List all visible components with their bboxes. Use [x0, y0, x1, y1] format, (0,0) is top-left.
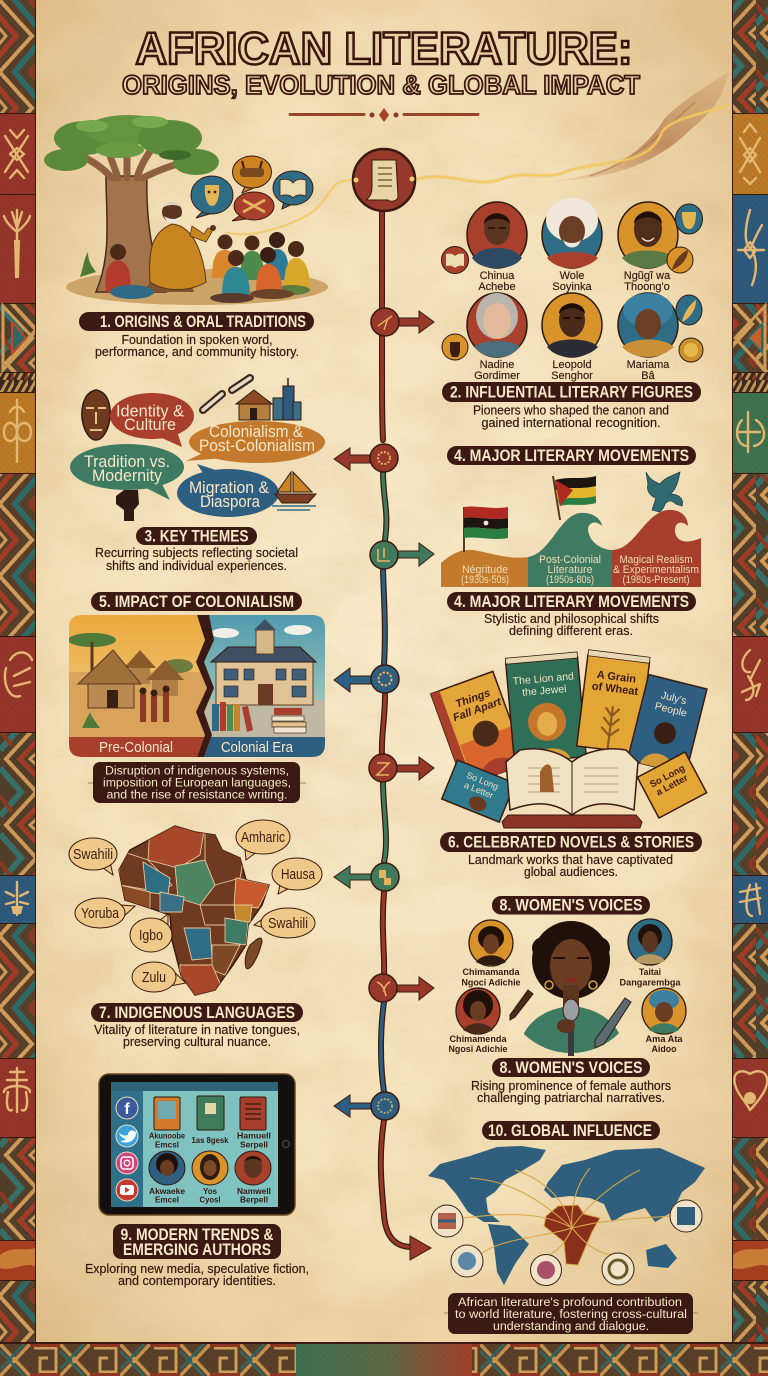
bubble: Yoruba: Yoruba — [81, 906, 120, 922]
section 9: tablet with emerging authors — [99, 1074, 295, 1215]
title divider ornament — [290, 108, 478, 122]
wave: Magical Realism — [612, 510, 701, 587]
icon: medal — [679, 338, 703, 362]
names of women authors: Aidoo — [652, 1044, 677, 1055]
book: Things Fall Apart — [431, 671, 526, 786]
bubble: Igbo — [130, 914, 172, 952]
medal: university seal — [451, 1245, 483, 1277]
wave labels: (1950s-80s) — [546, 574, 594, 586]
tablet screen — [111, 1082, 290, 1207]
book titles: Serpell — [240, 1140, 268, 1150]
text: themes description — [95, 545, 298, 573]
timeline node 4: blue left arrow — [334, 665, 399, 693]
bubble: tradition vs modernity: Tradition vs. — [84, 452, 170, 471]
main portrait with microphone — [524, 921, 619, 1056]
names of women authors: Chimamenda — [450, 1034, 507, 1045]
text: figures description — [473, 402, 669, 430]
portrait: Wole Soyinka — [542, 198, 602, 268]
heading: key themes: 3. KEY THEMES — [144, 528, 248, 546]
section 8: women's voices portraits — [448, 919, 686, 1056]
right patterned border — [732, 0, 768, 1376]
book: So Long a Letter gold: a Letter — [654, 772, 690, 798]
names row 2 — [474, 359, 670, 382]
bubble: drum — [232, 156, 272, 193]
panel: colonial school — [204, 615, 325, 757]
text: women's voices description: Rising prominence of female authors — [471, 1078, 671, 1093]
heading: modern trends: EMERGING AUTHORS — [123, 1241, 271, 1259]
icon: book — [442, 246, 468, 274]
names of women authors: Ngosi Adichie — [448, 1044, 508, 1055]
book: July's People: July's — [660, 689, 688, 707]
icon: dragon — [646, 472, 682, 512]
bubble: mask — [191, 176, 233, 218]
open book — [502, 749, 642, 828]
icon: Facebook: f — [124, 1101, 130, 1118]
names row 2: Nadine — [480, 359, 514, 371]
text: modern trends description: and contemporary identities. — [118, 1273, 276, 1288]
medal: laurel award — [602, 1253, 634, 1285]
bubble: Yoruba — [75, 898, 135, 928]
text: movements description: defining different eras. — [509, 623, 633, 638]
text box: colonialism description: imposition of European languages, — [103, 776, 291, 790]
title: ORIGINS, EVOLUTION & GLOBAL IMPACT — [122, 70, 640, 100]
wave labels — [461, 554, 699, 586]
golden routes — [462, 1168, 670, 1256]
icon: sailboat — [272, 472, 316, 510]
jagged divider — [196, 615, 214, 757]
names row 2: Senghor — [551, 370, 593, 382]
book: A Grain of Wheat — [577, 650, 650, 754]
section 4: movements wave chart — [441, 472, 701, 587]
portrait: Ngugi wa Thiong'o — [618, 202, 678, 268]
bubble: book — [273, 171, 313, 209]
timeline node 2: red left arrow — [334, 444, 398, 472]
wave labels: (1930s-50s) — [461, 574, 509, 586]
portrait: Ama Ata Aidoo — [642, 988, 686, 1034]
mini books — [154, 1096, 266, 1130]
text: movements description: Stylistic and philosophical shifts — [484, 611, 659, 626]
title — [122, 23, 640, 100]
book: The Lion and the Jewel — [505, 652, 586, 763]
book: Things Fall Apart: Things — [454, 687, 492, 711]
icon: Twitter bird — [116, 1125, 138, 1147]
bubble: identity and culture: Identity & — [116, 402, 185, 420]
text: figures description: Pioneers who shaped the canon and — [473, 402, 669, 418]
timeline node 7: red right arrow — [369, 974, 434, 1002]
title: AFRICAN LITERATURE: — [136, 23, 632, 74]
medal: library seal — [670, 1200, 702, 1232]
timeline start: scroll medallion — [353, 149, 415, 211]
bubble: quill — [232, 192, 274, 221]
bubble: Igbo: Igbo — [139, 928, 163, 944]
book: A Grain of Wheat: of Wheat — [591, 680, 639, 698]
elder storyteller — [145, 202, 216, 292]
bubble: identity and culture — [110, 393, 194, 447]
icon: Instagram — [116, 1152, 138, 1174]
author names: Namwell — [237, 1186, 271, 1196]
portrait: Leopold Senghor — [542, 293, 602, 357]
heading: modern trends: 9. MODERN TRENDS & — [120, 1226, 274, 1244]
text: novels description: Landmark works that have captivated — [468, 852, 673, 867]
section 6: stack of celebrated novels — [431, 650, 707, 828]
timeline node 6: green left arrow — [334, 863, 399, 891]
bubble: Hausa — [272, 858, 322, 894]
icon: fountain pen right — [595, 998, 631, 1048]
icon: quill — [667, 247, 693, 273]
names of women authors: Chimamanda — [462, 967, 520, 978]
names row 1: Achebe — [478, 281, 516, 293]
bubble: Swahili left: Swahili — [73, 847, 113, 863]
caption: Colonial Era: Colonial Era — [221, 740, 294, 756]
bubble: Hausa: Hausa — [281, 867, 316, 883]
text: women's voices description — [471, 1078, 671, 1105]
icon: fountain pen left — [510, 990, 533, 1020]
text: languages description — [94, 1022, 300, 1049]
caption: Pre-Colonial: Pre-Colonial — [99, 740, 173, 756]
book titles: Emcsl — [155, 1140, 179, 1150]
Africa highlighted — [544, 1205, 600, 1265]
book titles: Hamuell — [237, 1130, 271, 1140]
text: languages description: preserving cultural nuance. — [123, 1034, 271, 1049]
heading: origins: 1. ORIGINS & ORAL TRADITIONS — [100, 313, 306, 331]
book: July's People: People — [653, 700, 688, 720]
timeline spine with colour segments — [381, 212, 412, 1247]
icon: raised fist — [116, 490, 139, 521]
heading: indigenous languages: 7. INDIGENOUS LANGUAGES — [99, 1004, 295, 1022]
section 5: pre-colonial and colonial comparison — [68, 615, 325, 757]
bubble: tradition vs modernity: Modernity — [92, 466, 162, 485]
text: origins description: performance, and community history. — [95, 344, 299, 359]
text: movements description — [484, 611, 659, 638]
heading: women's voices top: 8. WOMEN'S VOICES — [500, 896, 642, 914]
names row 1: Ngũgĩ wa — [624, 270, 671, 282]
icon: YouTube — [116, 1179, 138, 1201]
author names — [149, 1186, 271, 1204]
names row 2: Leopold — [552, 359, 592, 371]
bubble: colonialism — [186, 421, 325, 463]
text: figures description: gained international recognition. — [482, 415, 660, 430]
icon: mask — [676, 204, 702, 234]
wave labels: Literature — [548, 564, 592, 576]
text: modern trends description: Exploring new media, speculative fiction, — [85, 1261, 309, 1276]
names of women authors: Ama Ata — [646, 1034, 683, 1045]
heading: global influence: 10. GLOBAL INFLUENCE — [488, 1122, 652, 1140]
heading: literary figures: 2. INFLUENTIAL LITERARY FIGURES — [450, 384, 693, 402]
section 1: baobab storytelling scene — [44, 115, 354, 305]
text box: global influence description: to world literature, fostering cross-cultural — [455, 1307, 687, 1321]
author names: Akwaeke — [149, 1186, 185, 1196]
book titles — [149, 1130, 271, 1150]
author names: Emcel — [155, 1194, 179, 1204]
heading: major literary movements bottom: 4. MAJOR LITERARY MOVEMENTS — [454, 593, 689, 611]
timeline node 5: red right arrow — [369, 754, 434, 782]
section 3: key themes bubbles — [70, 378, 325, 521]
wave labels: Post-Colonial — [539, 554, 601, 566]
icon: African mask — [82, 390, 110, 440]
bubble: Zulu: Zulu — [142, 970, 166, 986]
text: novels description: global audiences. — [524, 864, 618, 879]
text: women's voices description: challenging patriarchal narratives. — [477, 1090, 665, 1105]
names row 1: Thoong'o — [624, 281, 670, 293]
section 10: world map with connections — [428, 1146, 705, 1286]
section 2: literary figures portraits — [442, 198, 703, 382]
names of women authors: Taitai — [639, 967, 661, 978]
map of Africa — [118, 825, 270, 1000]
heading: impact of colonialism: 5. IMPACT OF COLONIALISM — [99, 593, 294, 611]
icon: hut and city — [236, 378, 301, 420]
bubble: colonialism: Colonialism & — [209, 422, 304, 441]
icon: pen — [676, 295, 702, 325]
bubble: Zulu — [132, 962, 186, 992]
bubble: Amharic: Amharic — [241, 830, 285, 846]
bubble: Amharic — [236, 820, 290, 860]
book: So Long a Letter blue — [442, 760, 515, 822]
wave: Post-Colonial — [528, 513, 612, 587]
book: The Lion and the Jewel: The Lion and — [512, 670, 575, 688]
book: So Long a Letter gold — [637, 752, 707, 818]
text: origins description: Foundation in spoken word, — [122, 332, 272, 347]
portrait: Tsitsi Dangarembga — [628, 919, 672, 965]
portrait: Mariama Ba — [618, 293, 678, 357]
book titles: 1as 8gesk — [192, 1135, 229, 1145]
names row 1: Chinua — [480, 270, 515, 282]
timeline node 3: green right arrow — [370, 541, 434, 569]
author portraits — [149, 1151, 271, 1185]
names of women authors — [448, 967, 683, 1055]
timeline node 1: red right arrow — [371, 308, 434, 336]
bubble: colonialism: Post-Colonialism — [199, 436, 315, 455]
book: The Lion and the Jewel: the Jewel — [522, 683, 567, 699]
section 7: language map of Africa — [69, 820, 322, 1000]
text: modern trends description — [85, 1261, 309, 1288]
bubble: Swahili left — [69, 838, 117, 875]
bottom patterned border — [0, 1342, 768, 1376]
timeline end arrow — [410, 1236, 431, 1260]
text: origins description — [95, 332, 299, 359]
wave labels: & Experimentalism — [613, 564, 699, 576]
bubble: migration and diaspora — [177, 464, 279, 517]
wave: Negritude — [441, 550, 530, 587]
heading: women's voices bottom: 8. WOMEN'S VOICES — [500, 1059, 642, 1077]
bubble: identity and culture: Culture — [124, 415, 176, 434]
book titles: Akunoobe — [149, 1130, 185, 1140]
ground — [66, 269, 328, 305]
flag: Pan-African tricolour — [464, 507, 508, 552]
heading: celebrated novels: 6. CELEBRATED NOVELS & STORIES — [448, 834, 694, 852]
medal: rose seal — [530, 1254, 562, 1286]
golden story thread — [225, 180, 354, 234]
grass — [80, 252, 96, 277]
baobab tree — [44, 115, 219, 292]
text box: colonialism description — [88, 762, 306, 803]
text: languages description: Vitality of literature in native tongues, — [94, 1022, 300, 1037]
book: So Long a Letter blue: So Long — [465, 770, 500, 792]
wave labels: Magical Realism — [620, 554, 692, 566]
book: July's People — [627, 675, 707, 774]
wave labels: Négritude — [462, 564, 508, 576]
flag: liberation flag — [553, 476, 596, 520]
portrait: Chinua Achebe — [467, 202, 527, 268]
icon: Facebook — [116, 1097, 138, 1119]
text box: colonialism description: and the rise of resistance writing. — [106, 788, 288, 802]
names row 2: Gordimer — [474, 370, 520, 382]
text box: global influence description: understanding and dialogue. — [493, 1319, 649, 1333]
wave labels: (1980s-Present) — [622, 574, 690, 586]
text: themes description: shifts and individual experiences. — [106, 558, 287, 573]
author names: Yos — [203, 1186, 217, 1196]
portrait: Chimamanda bottom — [456, 988, 500, 1034]
book: So Long a Letter blue: a Letter — [463, 780, 495, 801]
book: A Grain of Wheat: A Grain — [596, 669, 637, 686]
text box: global influence description — [444, 1293, 698, 1334]
book: Things Fall Apart: Fall Apart — [451, 695, 504, 724]
text box: colonialism description: Disruption of indigenous systems, — [105, 764, 289, 778]
heading: modern trends — [113, 1224, 281, 1259]
names row 1: Soyinka — [552, 281, 592, 293]
listening children — [106, 232, 310, 303]
text: novels description — [468, 852, 673, 879]
names row 2: Bâ — [641, 370, 656, 382]
bubble: migration and diaspora: Diaspora — [200, 492, 260, 511]
names row 1 — [478, 270, 671, 293]
bubble: Swahili right: Swahili — [268, 916, 308, 932]
bubble: Swahili right — [254, 908, 315, 938]
names of women authors: Ngoci Adichie — [462, 978, 520, 988]
portrait: Nadine Gordimer — [467, 293, 527, 357]
portrait: Chimamanda top — [469, 920, 513, 966]
text: themes description: Recurring subjects reflecting societal — [95, 545, 298, 560]
book: So Long a Letter gold: So Long — [648, 763, 687, 790]
text box: global influence description: African literature's profound contribution — [458, 1295, 682, 1309]
flowing ribbon with golden thread — [416, 72, 728, 182]
heading: major literary movements top: 4. MAJOR LITERARY MOVEMENTS — [454, 447, 689, 465]
names of women authors: Dangarembga — [620, 978, 681, 988]
icon: broken chain — [203, 378, 250, 410]
panel: pre-colonial village — [68, 615, 209, 757]
author names: Cyosl — [200, 1194, 220, 1204]
medal: publisher seal — [431, 1205, 463, 1237]
names row 1: Wole — [560, 270, 584, 282]
icon: fist — [442, 334, 468, 360]
names row 2: Mariama — [627, 359, 670, 371]
continents — [428, 1146, 705, 1285]
bubble: tradition vs modernity — [70, 444, 184, 500]
bubble: migration and diaspora: Migration & — [189, 478, 270, 497]
author names: Berpell — [240, 1194, 268, 1204]
left patterned border — [0, 0, 36, 1376]
timeline node 8: blue left arrow — [334, 1092, 399, 1120]
